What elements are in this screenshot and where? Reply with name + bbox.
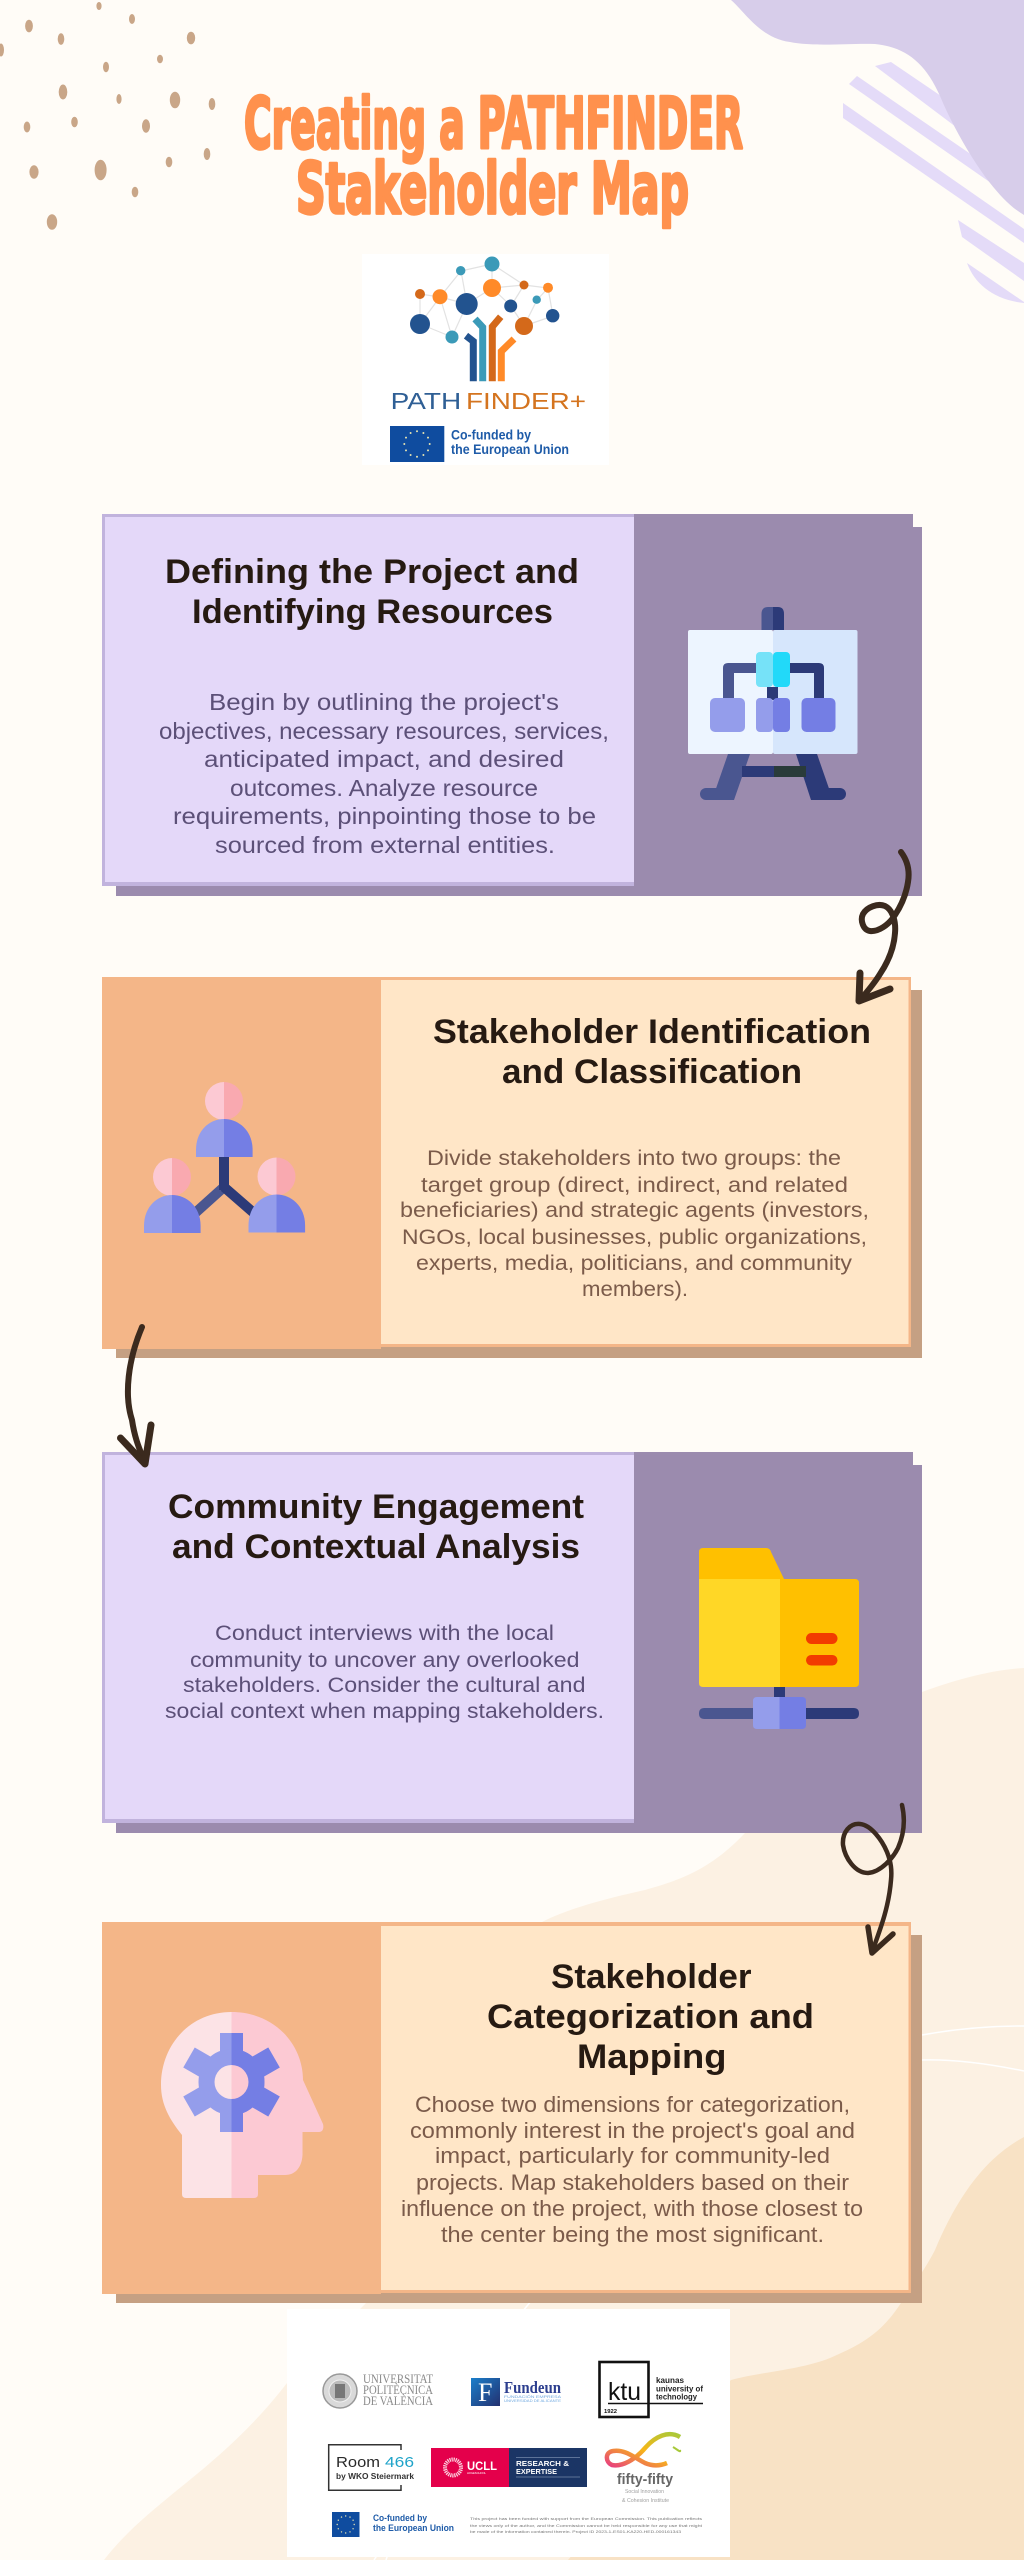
text: step 1 body: requirements, pinpointing those to be [173,803,596,829]
heading: step 3: and Contextual Analysis [172,1528,580,1566]
text: step 1 body: sourced from external entities. [215,832,555,858]
arrow: step 2 to step 3 [120,1327,151,1464]
text: step 1 body [159,689,609,858]
text: funding disclaimer [470,2516,703,2534]
text: step 1 body: Begin by outlining the project's [209,689,559,715]
title: Stakeholder Map [296,148,689,230]
text: step 1 body: outcomes. Analyze resource [230,775,538,801]
panel: step 2 stakeholder identification [102,977,922,1358]
logo: Room 466: Room [336,2454,380,2471]
logo: KTU: ktu [608,2378,641,2406]
logo: fifty-fifty: & Cohesion Institute [622,2498,669,2504]
logo: Room 466: 466 [385,2454,414,2471]
background: deeper peach blob bottom right [568,2137,1024,2560]
logo: fifty-fifty: Social Innovation [625,2489,664,2495]
logo: UCLL research and expertise: EXPERTISE [516,2467,557,2476]
text: step 2 body: beneficiaries) and strategic agents (investors, [400,1198,869,1222]
logo: KTU: 1922 [604,2409,617,2415]
icon: three connected people [144,1082,305,1233]
text: step 4 body: impact, particularly for community-led [435,2143,830,2168]
logo: UCLL research and expertise: UCLL [467,2461,497,2473]
logo: co-funded by the EU: Co-funded by [373,2513,427,2523]
logo: Fundeun: Fundeun [504,2378,561,2397]
logo: Room 466 [329,2445,415,2490]
logo: KTU [600,2362,703,2417]
text: step 2 body: NGOs, local businesses, public organizations, [402,1225,867,1249]
logo: Room 466: by WKO Steiermark [336,2472,415,2481]
text: step 2 body: members). [582,1277,688,1301]
text: step 4 body: commonly interest in the project's goal and [410,2118,855,2143]
logo: co-funded by the EU: the European Union [373,2523,454,2533]
logo: Universitat Politecnica de Valencia: UNIVERSITAT [363,2372,433,2386]
icon: head with gear [161,2012,323,2198]
text: step 3 body: social context when mapping stakeholders. [165,1699,604,1723]
text: step 3 body: Conduct interviews with the local [215,1621,554,1645]
text: step 4 body: influence on the project, with those closest to [401,2196,863,2221]
logo: co-funded by the EU [332,2512,454,2537]
logo: PATHFINDER+ co-funded by EU: FINDER+ [466,388,586,414]
heading: step 2: Stakeholder Identification [433,1013,871,1051]
logo: PATHFINDER+ co-funded by EU [362,254,609,465]
background: thin white curves [374,2026,1024,2560]
text: step 4 body: Choose two dimensions for categorization, [415,2092,850,2117]
heading: step 4 [487,1958,814,2076]
logo: KTU: university of [656,2384,703,2394]
logo: UCLL research and expertise: RESEARCH & [516,2459,570,2468]
logo: Fundeun: FUNDACIÓN EMPRESA [504,2394,562,2399]
heading: step 4: Stakeholder [551,1958,752,1996]
text: funding disclaimer: the views only of the author, and the Commission cannot be held responsible for any use that might [470,2523,703,2528]
logo: Fundeun: F [478,2378,492,2407]
arrow: step 3 to step 4 [843,1805,904,1953]
logo: Fundeun [471,2378,562,2407]
background: lilac blob top right [731,0,1024,215]
title [244,83,743,230]
arrow: step 1 to step 2 [859,852,909,1001]
logo: Universitat Politecnica de Valencia [323,2372,433,2408]
text: step 1 body: objectives, necessary resources, services, [159,718,609,744]
heading: step 2: and Classification [502,1053,802,1091]
logo: KTU: technology [656,2392,697,2402]
decorative dots top left [0,2,215,230]
text: step 2 body [400,1146,869,1301]
panel: step 1 defining the project [102,514,922,896]
text: step 2 body: experts, media, politicians, and community [416,1251,852,1275]
heading: step 3: Community Engagement [168,1488,584,1526]
background: pale peach blob bottom [104,1668,1024,2560]
text: funding disclaimer: This project has been funded with support from the European Commission. This publication reflects [470,2516,702,2521]
logo: Universitat Politecnica de Valencia: POLITÈCNICA [363,2383,433,2397]
text: step 4 body [401,2092,863,2247]
text: step 4 body: the center being the most significant. [441,2222,824,2247]
text: step 1 body: anticipated impact, and desired [204,746,564,772]
background: lilac stripes [843,62,1024,303]
heading: step 3 [168,1488,584,1566]
heading: step 4: Categorization and [487,1998,814,2036]
logo: fifty-fifty: fifty-fifty [617,2471,674,2488]
logo: PATHFINDER+ co-funded by EU: PATH [391,388,461,414]
heading: step 1 [165,553,579,631]
heading: step 1: Defining the Project and [165,553,579,591]
logo: UCLL research and expertise: HOGESCHOOL [467,2471,487,2475]
logo: UCLL research and expertise [431,2448,587,2487]
heading: step 4: Mapping [577,2038,726,2076]
logo: Fundeun: UNIVERSIDAD DE ALICANTE [504,2399,562,2403]
panel: step 4 categorization and mapping [102,1922,922,2303]
icon: presentation easel [688,607,858,800]
logo: KTU: kaunas [656,2375,684,2385]
icon: network folder [699,1548,859,1729]
text: step 3 body: stakeholders. Consider the cultural and [183,1673,586,1697]
heading: step 2 [433,1013,871,1091]
text: step 3 body: community to uncover any overlooked [190,1648,580,1672]
logo: PATHFINDER+ co-funded by EU: Co-funded by [451,427,532,442]
text: step 2 body: Divide stakeholders into two groups: the [427,1146,841,1170]
text: step 3 body [165,1621,604,1723]
logo: PATHFINDER+ co-funded by EU: the European Union [451,442,569,457]
text: step 2 body: target group (direct, indirect, and related [421,1173,848,1197]
logo: Universitat Politecnica de Valencia: DE VALÈNCIA [363,2394,433,2408]
panel: step 3 community engagement [102,1452,922,1833]
text: funding disclaimer: be made of the information contained therein. Project ID 2023-1-ES01-KA220-HED-000161343 [470,2529,681,2534]
text: step 4 body: projects. Map stakeholders based on their [416,2170,849,2195]
heading: step 1: Identifying Resources [192,593,553,631]
logo: fifty-fifty [607,2434,680,2504]
panel: partner logos [287,2309,730,2557]
